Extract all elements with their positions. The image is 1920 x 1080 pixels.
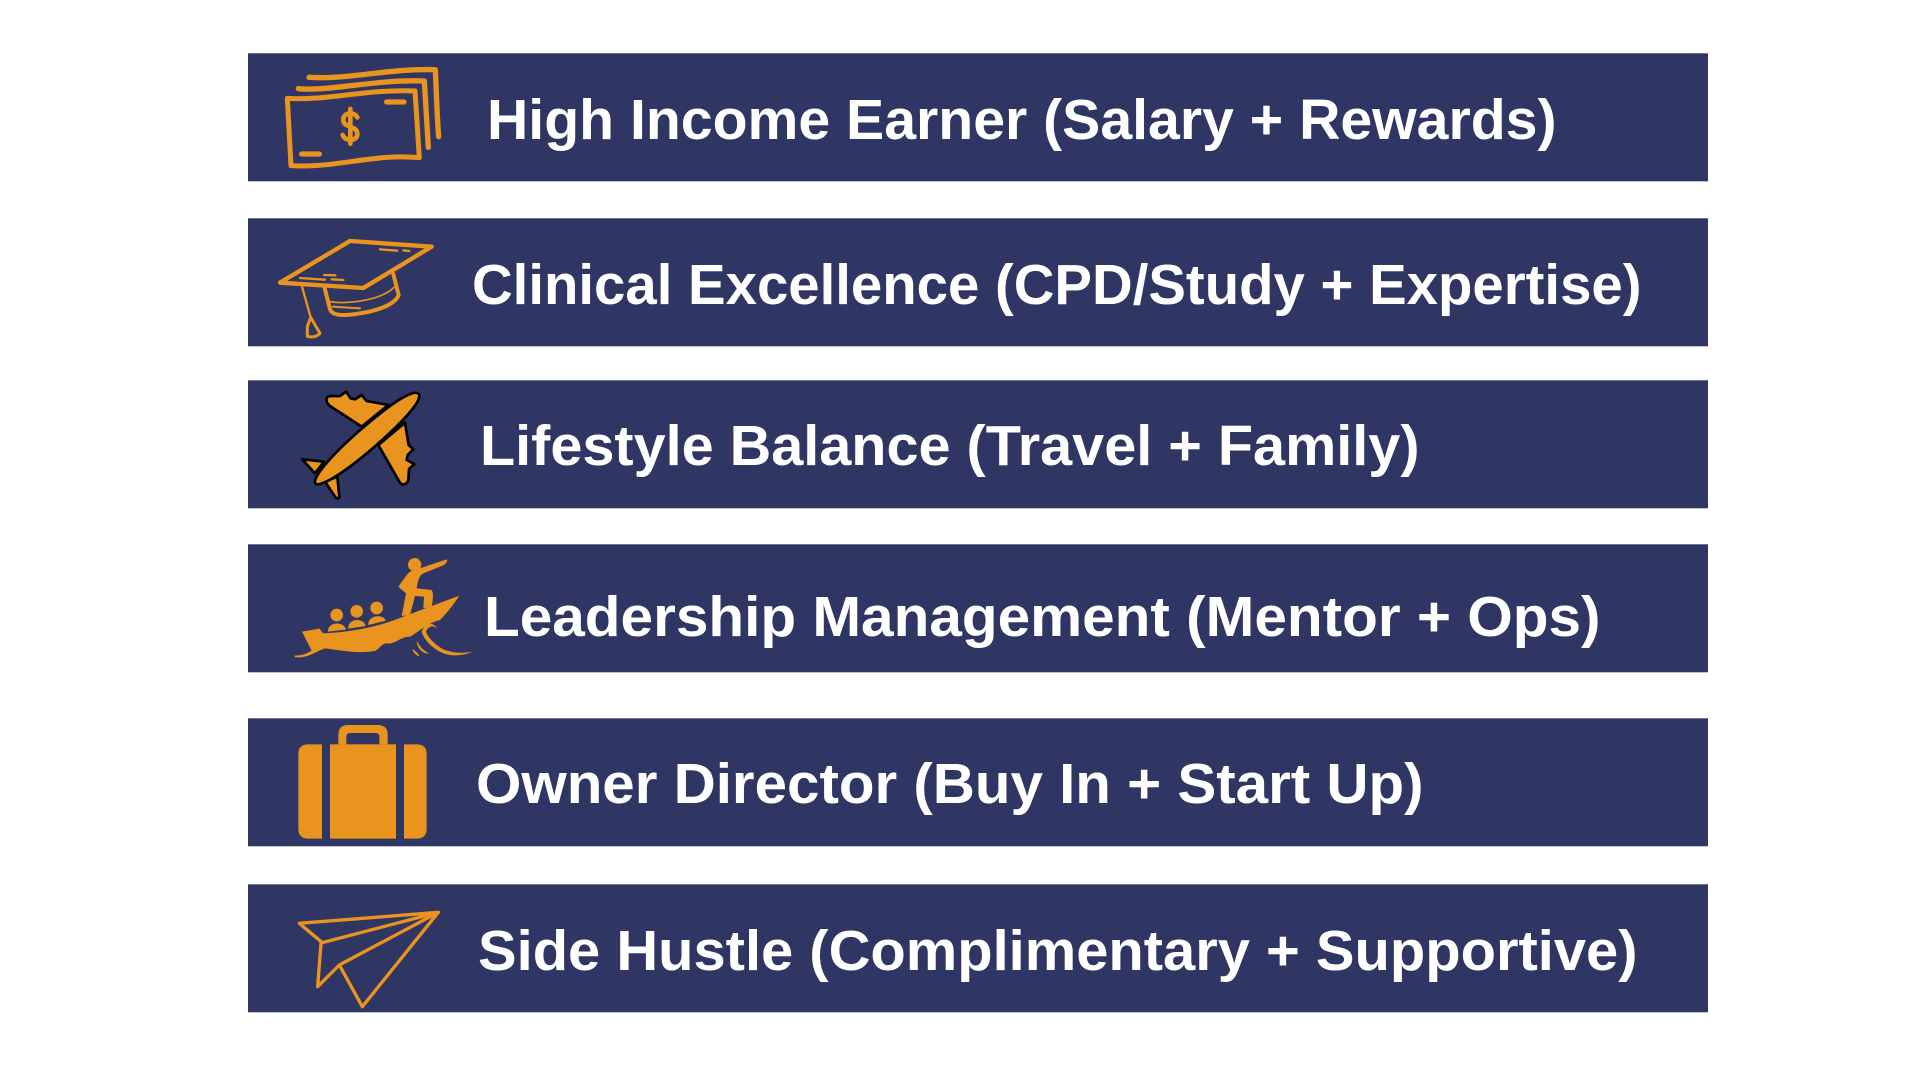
icon: banknotes	[287, 70, 439, 166]
bar background	[248, 53, 1708, 181]
bar background	[248, 884, 1708, 1012]
label: owner director: Owner Director (Buy In + Start Up)	[476, 752, 1424, 816]
panel: clinical excellence	[248, 218, 1708, 346]
panel: high income earner	[248, 53, 1708, 181]
icon: airplane	[302, 386, 426, 498]
label: side hustle: Side Hustle (Complimentary + Supportive)	[478, 919, 1638, 983]
panel: side hustle	[248, 884, 1708, 1012]
icon: paper plane	[299, 912, 438, 1007]
label: clinical excellence: Clinical Excellence (CPD/Study + Expertise)	[472, 253, 1642, 317]
label: high income earner: High Income Earner (Salary + Rewards)	[487, 88, 1556, 152]
bar background	[248, 380, 1708, 508]
bar background	[248, 718, 1708, 846]
panel: leadership management	[248, 544, 1708, 672]
bar background	[248, 218, 1708, 346]
icon: suitcase	[298, 725, 427, 839]
icon: leader on boat	[294, 558, 472, 657]
panel: lifestyle balance	[248, 380, 1708, 508]
panel: owner director	[248, 718, 1708, 846]
icon: graduation cap	[280, 241, 432, 337]
label: lifestyle balance: Lifestyle Balance (Travel + Family)	[480, 414, 1420, 478]
label: leadership management: Leadership Management (Mentor + Ops)	[484, 585, 1600, 649]
bar background	[248, 544, 1708, 672]
